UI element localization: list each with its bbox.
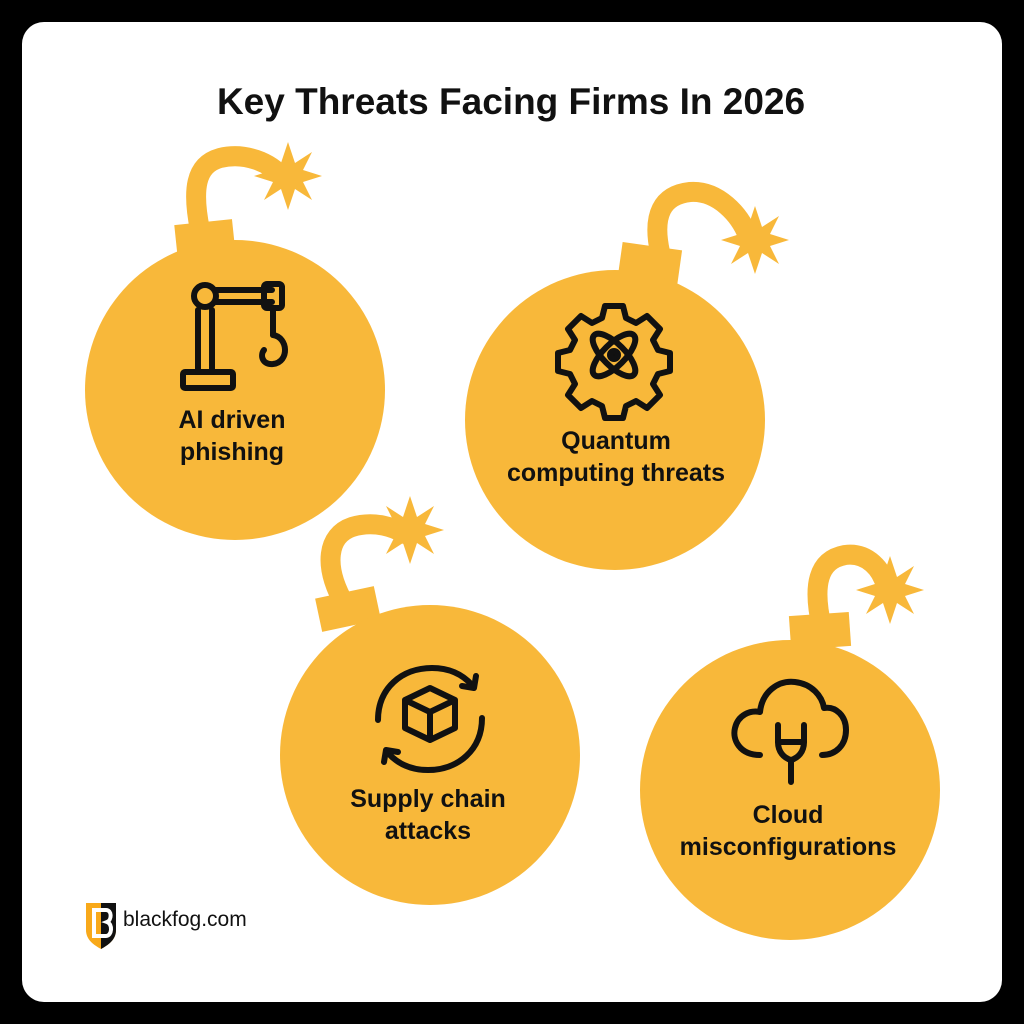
icon: gear with atom — [558, 306, 670, 418]
label: computing threats — [507, 459, 725, 487]
logo: blackfog.com — [123, 908, 247, 931]
bomb: Supply chain attacks — [280, 496, 580, 905]
bomb: Cloud misconfigurations — [640, 555, 940, 940]
label: Cloud — [753, 801, 823, 829]
icon: shield logo — [86, 903, 116, 949]
label: AI driven — [179, 406, 285, 434]
logo — [86, 903, 247, 949]
bomb: Quantum computing threats — [465, 192, 789, 570]
icon: cloud with wrench — [734, 682, 846, 782]
label: Quantum — [561, 427, 671, 455]
title: Key Threats Facing Firms In 2026 — [217, 81, 805, 122]
label: phishing — [180, 438, 284, 466]
icon: robotic arm with hook — [183, 284, 285, 388]
bomb: AI driven phishing — [85, 142, 385, 540]
icon: box with cycle arrows — [378, 668, 482, 770]
label: attacks — [385, 817, 471, 845]
label: Supply chain — [350, 785, 506, 813]
label: misconfigurations — [680, 833, 896, 861]
